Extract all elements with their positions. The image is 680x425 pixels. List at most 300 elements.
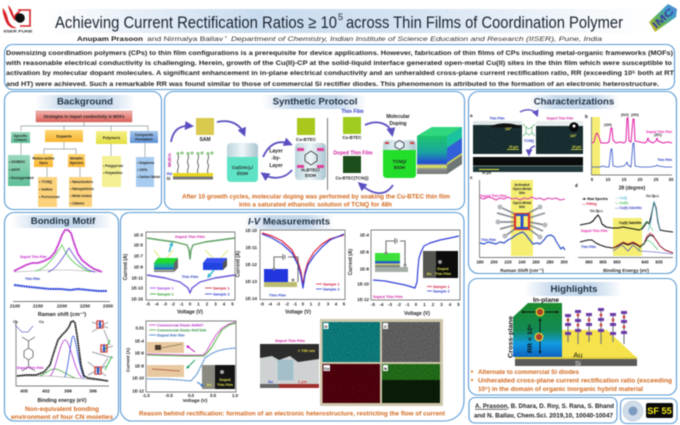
I-V chart: thin film: 1E-11 [246, 245, 258, 250]
Raman chart [470, 175, 568, 274]
SAM substrate: Si [166, 176, 170, 181]
XRD chart: Thin Film [657, 158, 672, 162]
I-V chart: doped film: 1E-6 [360, 250, 370, 254]
contact angle images: 132° [505, 127, 512, 131]
XRD chart: 25 [654, 177, 659, 182]
protocol note [182, 194, 450, 208]
I-V chart: both films: 2 [206, 302, 209, 306]
panel: abstract: activation by molecular dopant molecules. A significant enhancement in in-plane electrical conductivity and an unheralded cross-plane current rectification ratio, RR (exceeding 10⁵ both at RT [6, 70, 675, 77]
I-V chart: both films: Current (A) [123, 253, 129, 280]
rectification note: Reason behind rectification: formation of an electronic heterostructure, restricting the flow of current [139, 410, 445, 418]
in-plane label: In-plane [533, 297, 559, 304]
flowchart root: Strategies to impart conductivity in MOFs [44, 114, 125, 119]
I-V chart: doped film: Doped [437, 267, 449, 271]
Raman chart: Open-Metal [513, 201, 531, 205]
I-V chart: diode comparison: 1E-4 [135, 338, 145, 344]
MOF chain structure [88, 321, 113, 376]
EDS elemental maps [320, 319, 443, 406]
flowchart: composite formation: Formation [135, 138, 153, 142]
I-V chart: both films: 5 [231, 302, 234, 306]
I-V chart: thin film: 5 [343, 302, 346, 306]
I-V chart: doped film: 2 [432, 302, 435, 307]
XRD chart: 15 [622, 177, 627, 182]
XPS chart: Cu(II) Satellite [619, 221, 642, 225]
heading: synthetic protocol: Synthetic Protocol [273, 96, 357, 108]
heading: I-V measurements: I-V Measurements [248, 216, 330, 228]
I-V chart: thin film: Thin Film [269, 294, 286, 298]
beaker: H2BTEC: EtOH [305, 173, 316, 178]
beaker: copper acetate [227, 143, 258, 182]
Raman CN chart: 2250 [80, 304, 91, 308]
I-V chart: doped film: -4 [380, 302, 384, 307]
label: molecular doping [386, 114, 410, 127]
flowchart: dopants: Metallic [70, 156, 83, 160]
SEM cross-section: 1 μm [298, 380, 307, 384]
I-V chart: diode comparison: -0.5 [165, 393, 173, 398]
Raman chart: 240 [518, 260, 526, 264]
Raman chart: 260 [532, 260, 540, 264]
contact angle images: 10 μm [509, 145, 518, 149]
I-V chart: both films: -3 [163, 302, 168, 306]
I-V chart: diode comparison: Current (A) [126, 347, 130, 372]
protocol note: into a saturated ethanolic solution of TCNQ for 48h [239, 202, 392, 208]
I-V chart: doped film: 5 [457, 302, 460, 307]
XPS chart: 950 [613, 260, 621, 264]
I-V chart: diode comparison: 1E-12 [132, 388, 145, 394]
doped thin film swatch [333, 150, 373, 180]
I-V chart: doped film: -1 [406, 302, 410, 307]
Raman chart: c [470, 175, 473, 180]
Raman chart: Site [519, 205, 525, 209]
XRD chart: Doped Thin Film [646, 130, 672, 134]
I-V chart: both films: 1E-13 [131, 286, 144, 290]
I-V chart: doped film: 1E-4 [360, 232, 370, 238]
SEM cross-section: Au [268, 380, 274, 384]
Raman chart: 280 [546, 260, 554, 264]
SEM cross-section: Doped Thin Film [275, 339, 305, 343]
logo: IISER Pune: IISER PUNE [4, 28, 33, 34]
citation box: and N. Ballav, Chem.Sci. 2019,10, 10040-10047 [474, 412, 613, 420]
I-V chart: both films: 3 [214, 302, 217, 306]
XPS N1s chart: Doped Thin Film [17, 366, 44, 370]
XRD chart [585, 113, 674, 192]
badge: SF 55 [620, 398, 677, 424]
flowchart: composite formation: • CNTs [137, 168, 148, 172]
flowchart: specific linkers: • Deoxygenated [9, 176, 34, 180]
I-V chart: doped film: 3 [440, 302, 443, 307]
arrows: cycle [171, 121, 393, 193]
XPS N1s chart: Cu [13, 320, 18, 324]
I-V chart: diode comparison: 1E-8 [135, 364, 145, 368]
doped thin film swatch: Doped Thin Film [333, 150, 373, 156]
XRD chart: 30 [669, 177, 674, 182]
label: molecular doping: Doping [389, 121, 407, 127]
I-V chart: both films: -4 [155, 302, 159, 306]
contact angle images: Doped Thin Film [547, 116, 573, 120]
XPS chart: Cu 2p₁/₂ [590, 209, 604, 213]
title banner: Achieving Current Rectification Ratios ≥ 10 [55, 13, 337, 32]
XPS chart: Cu 2p₃/₂ [646, 194, 660, 198]
contact angle images: 50 μm [482, 171, 491, 175]
device block: RR < 10⁵ [527, 324, 534, 353]
I-V chart: both films: Voltage (V) [177, 310, 203, 316]
EDS elemental maps: C [384, 324, 387, 329]
I-V chart: diode comparison: Doped [219, 378, 231, 382]
flowchart: specific linkers: Linkers [14, 138, 27, 142]
heading: background: Background [57, 96, 113, 108]
contact angle images: a [470, 113, 473, 118]
I-V chart: both films: 1E-9 [134, 264, 144, 270]
I-V chart: doped film [348, 230, 460, 317]
I-V chart: doped film: 4 [449, 302, 452, 307]
Raman chart: Raman Shift (cm⁻¹) [500, 268, 544, 274]
device block: Cross-plane [508, 316, 514, 358]
flowchart: composite formation: • Carbon Waste [137, 175, 161, 179]
Raman CN chart: 2100 [10, 304, 21, 308]
flowchart: dopants: Dyes [39, 161, 48, 165]
beaker: TCNQ: EtOH [394, 165, 405, 170]
I-V chart: diode comparison: 1.0 [232, 393, 239, 398]
I-V chart: both films: 1E-11 [132, 276, 144, 280]
I-V chart: both films: 1 [197, 302, 200, 306]
contact angle images: 132° [570, 134, 577, 138]
heading: bonding motif: Bonding Motif [31, 216, 96, 227]
panel: abstract: with reasonable electrical conductivity is challenging. Herein, growth of the Cu(II)-CP at the solid-liquid interface generated open-metal Cu(II) sites in the thin film which were susceptible to [5, 60, 672, 67]
I-V chart: both films: -2 [171, 302, 176, 306]
I-V chart: both films: Doped Thin Film [175, 235, 205, 239]
I-V chart: doped film: -5 [371, 302, 376, 307]
XRD chart: (010) [621, 113, 629, 117]
I-V chart: thin film: 1E-13 [245, 279, 258, 284]
I-V chart: doped film: 1E-8 [360, 266, 370, 272]
Raman chart: Doped Thin Film [480, 194, 507, 198]
I-V chart: thin film: -2 [285, 302, 290, 306]
logo: IMC diamond: IMC [651, 6, 677, 31]
flowchart: dopants: Dopants [56, 134, 72, 138]
thin film swatch [341, 109, 364, 140]
I-V chart: both films: 1E-3 [134, 232, 144, 238]
SAM swatch: SAM [199, 137, 211, 143]
I-V chart: both films: 0 [189, 302, 192, 306]
XPS chart: — Fitting [582, 202, 597, 206]
XPS N1s chart: Binding energy (eV) [38, 398, 87, 404]
I-V chart: diode comparison: 0.5 [210, 393, 217, 398]
SAM substrate: Au [166, 171, 173, 176]
author line: Department of Chemistry, Indian Institute of Science Education and Research (IISER), Pune, India [231, 36, 602, 43]
author line: Anupam Prasoon [77, 36, 143, 43]
author line: and Nirmalya Ballav [147, 36, 224, 43]
I-V chart: thin film: 1E-14 [245, 296, 258, 301]
contact angle images: TCNQ [524, 139, 534, 143]
panel: highlights [468, 278, 676, 395]
XPS chart: d [575, 183, 578, 188]
contact angle images: Thin Film [489, 116, 505, 120]
XPS N1s chart: 396 [89, 388, 97, 394]
I-V chart: doped film: Sample 1 [433, 285, 450, 289]
I-V chart: both films: Sample 1 [157, 286, 174, 290]
panel: abstract: and HT) were achieved. Such a remarkable RR was found similar to those of commercial Si rectifier diodes. This phenomenon is attributed to the formation of an electronic heterostructure. [6, 81, 659, 88]
SAM swatch [196, 118, 214, 143]
protocol note: After 10 growth cycles, molecular doping was performed by soaking the Cu-BTEC thin film [182, 194, 450, 200]
SEM cross-section: ≈ 700 nm [298, 348, 315, 353]
flowchart: dopants: • TCNQ [39, 180, 52, 184]
XPS N1s chart: Cu [39, 320, 44, 324]
contact angle images: 10 μm [572, 145, 581, 149]
I-V chart: thin film: Current (A) [236, 250, 242, 277]
I-V chart: thin film: -3 [276, 302, 281, 306]
flowchart: polymers: Polymers [103, 135, 120, 140]
I-V chart: thin film: 3 [327, 302, 330, 306]
XRD chart: (100) [604, 123, 612, 127]
flowchart: specific linkers: Specific [14, 134, 27, 138]
Raman CN chart: Raman shift (cm⁻¹) [38, 312, 86, 318]
I-V chart: diode comparison: Thin Film [217, 383, 233, 387]
I-V chart: doped film: Sample 2 [433, 290, 450, 294]
layer by layer label [269, 148, 283, 169]
EDS elemental maps: Cu [324, 366, 330, 371]
Raman chart: Thin Film [481, 238, 496, 242]
flowchart: dopants: • Metal oxides [70, 194, 92, 198]
I-V chart: doped film: -3 [388, 302, 393, 307]
I-V chart: thin film: -4 [268, 302, 273, 306]
XRD chart: b [585, 114, 588, 119]
Raman chart: 300 [560, 260, 568, 264]
I-V chart: thin film: 0 [302, 302, 305, 306]
flowchart: dopants: • Nanoclusters [70, 180, 93, 184]
Raman chart: Open-Metal [513, 187, 531, 191]
highlight bullets [471, 369, 672, 393]
panel: background [4, 92, 162, 210]
I-V chart: doped film: Au [427, 272, 431, 276]
XPS chart: — Cu(II) Satellite [615, 206, 642, 210]
vertical divider [326, 118, 328, 190]
label: molecular doping: Molecular [386, 114, 410, 120]
I-V chart: both films: 4 [223, 302, 226, 306]
I-V chart: both films: 1E-7 [134, 254, 144, 258]
highlight bullets: Unheralded cross-plane current rectification ratio (exceeding [478, 378, 672, 384]
XPS N1s chart: 402 [42, 388, 50, 394]
I-V chart: thin film: 1 [310, 302, 313, 306]
XRD chart: 20 [638, 177, 643, 182]
flowchart root [36, 111, 132, 122]
I-V chart: both films: -5 [146, 302, 151, 306]
layer by layer label: Layer [269, 148, 283, 154]
Raman CN chart: 2300 [103, 304, 114, 308]
I-V chart: diode comparison: -1.0 [142, 393, 150, 398]
citation box [469, 398, 617, 423]
heading: characterizations: Characterizations [534, 96, 614, 108]
I-V chart: thin film: Sample 1 [323, 282, 340, 286]
I-V chart: both films: 1E-15 [131, 296, 144, 302]
EDS elemental maps: N [384, 366, 387, 371]
panel: characterizations [468, 92, 676, 274]
device stack [417, 127, 462, 174]
layer by layer label: -by- [271, 156, 281, 162]
SEM cross-section [260, 339, 319, 388]
I-V chart: doped film: Current (A) [348, 248, 354, 275]
gold substrate: Si [575, 360, 581, 368]
I-V chart: both films: 1E-5 [134, 242, 144, 248]
I-V chart: diode comparison: Au [207, 383, 211, 387]
XRD chart: 2θ (degree) [619, 186, 646, 192]
Raman chart: 180 [476, 260, 484, 264]
panel: abstract [4, 44, 675, 90]
I-V chart: diode comparison [126, 321, 239, 404]
thin film swatch: Thin Film [341, 109, 364, 115]
citation box: A. Prasoon, B. Dhara, D. Roy, S. Rana, S. Bhand [475, 403, 614, 410]
XPS chart: 935 [655, 260, 663, 264]
XRD chart: (201) [654, 133, 662, 137]
XPS chart: 940 [641, 260, 649, 264]
title banner [45, 9, 645, 33]
Cu-BTEC swatch: Cu-BTEC [296, 137, 317, 142]
beaker: H2BTEC [295, 143, 326, 180]
flowchart: dopants [32, 130, 94, 207]
I-V chart: thin film: 4 [335, 302, 338, 306]
I-V chart: both films [123, 232, 235, 316]
SAM substrate: MUDA [167, 153, 172, 167]
Cu-BTEC swatch [296, 118, 317, 142]
gold substrate [515, 330, 637, 368]
I-V chart: diode comparison: Commercial Diode IN4733A [157, 328, 207, 332]
XPS N1s chart: 399 [64, 388, 72, 394]
bonding note [11, 406, 114, 421]
I-V chart: thin film: Voltage (V) [285, 310, 311, 316]
Raman chart: Activated [514, 183, 530, 187]
molecular pillars [565, 308, 627, 344]
I-V chart: doped film: -2 [397, 302, 402, 307]
flowchart: dopants: Redox-active [32, 156, 55, 160]
XPS chart: Binding Energy (eV) [603, 268, 649, 274]
XRD chart: 5 [591, 177, 594, 182]
highlight bullets: Alternate to commercial Si diodes [478, 369, 580, 376]
I-V chart: diode comparison: Commercial Diode IN4007 [157, 324, 204, 328]
flowchart: dopants: • Nanoparticles [70, 187, 94, 191]
I-V chart: thin film: 2 [318, 302, 321, 306]
I-V chart: both films: Sample 2 [157, 292, 174, 296]
I-V chart: thin film: 1E-10 [245, 228, 258, 233]
flowchart: dopants: • Cations [70, 202, 84, 206]
panel: abstract: Downsizing coordination polymers (CPs) to thin film configurations is a prerequisite for device applications. However, fabrication of thin films of CPs including metal-organic frameworks (MOFs) [6, 50, 673, 57]
XRD chart: 10 [606, 177, 611, 182]
logo: IISER Pune [3, 5, 33, 34]
flowchart: specific linkers: • DOBDC [9, 160, 26, 164]
flowchart: dopants: • Ferrocene [39, 195, 60, 199]
flowchart: polymers [96, 131, 127, 187]
I-V chart: thin film: -1 [293, 302, 298, 306]
author line: * [225, 36, 227, 42]
beaker: H2BTEC: H₂BTEC/ [301, 168, 320, 172]
SAM substrate [166, 152, 213, 181]
I-V chart: both films: -1 [180, 302, 184, 306]
I-V chart: diode comparison: Voltage (V) [183, 398, 208, 404]
I-V chart: doped film: Doped Thin Film [373, 295, 403, 299]
I-V chart: both films: Thin Film [182, 275, 199, 279]
panel: synthetic protocol [164, 92, 464, 210]
flowchart: specific linkers: • HITP [9, 168, 21, 172]
flowchart: polymers: • Polypyrrole [103, 164, 123, 168]
gold substrate: Au [573, 350, 583, 360]
I-V chart: doped film: 0 [415, 302, 418, 307]
panel: bonding motif [4, 212, 118, 421]
EDS elemental maps: O [324, 324, 327, 329]
beaker: TCNQ [383, 140, 416, 178]
I-V chart: diode comparison: 0.0 [188, 393, 195, 398]
Raman CN chart: 2150 [33, 304, 44, 308]
XRD chart: (200) [631, 113, 639, 117]
I-V chart: thin film: -5 [260, 302, 265, 306]
Raman chart: 200 [490, 260, 498, 264]
XPS N1s chart: 405 [20, 388, 28, 394]
device block [508, 297, 562, 358]
beaker: copper acetate: Cu(OAc)₂/ [232, 165, 254, 170]
layer by layer label: Layer [269, 163, 283, 169]
contact angle images [470, 110, 583, 175]
panel: I-V measurements [120, 212, 464, 421]
Raman CN chart: 2200 [57, 304, 68, 308]
I-V chart: diode comparison: 0.01 [135, 326, 145, 330]
beaker: copper acetate: EtOH [237, 171, 248, 176]
XPS chart: Doped Thin Film [581, 229, 608, 233]
Raman CN chart: Doped Thin Film [20, 255, 47, 259]
XPS chart: 960 [585, 260, 593, 264]
highlight bullets: 10⁵) in the domain of organic inorganic hybrid material [478, 386, 643, 393]
XPS N1s chart [13, 320, 109, 404]
MOF structure [496, 204, 548, 240]
I-V chart: diode comparison: Doped thin film [157, 334, 185, 338]
I-V chart: thin film [236, 228, 346, 316]
I-V chart: both films: Sample 1 [213, 286, 230, 290]
thin film swatch: Cu-BTEC [342, 135, 362, 140]
I-V chart: thin film: 1E-12 [245, 262, 258, 267]
flowchart: dopants: • Iodine [39, 188, 53, 192]
beaker: TCNQ: TCNQ/ [393, 159, 407, 164]
heading: highlights: Highlights [551, 284, 597, 295]
XPS chart: -■- Raw Spectra [582, 197, 608, 201]
XPS chart: — Cu(II) [615, 201, 628, 205]
badge: SF 55: SF 55 [647, 406, 672, 416]
I-V chart: doped film: Thin Film [435, 272, 451, 276]
Raman CN chart [10, 230, 114, 318]
logo: IMC diamond [649, 4, 677, 32]
I-V chart: thin film: Sample 2 [323, 288, 340, 292]
I-V chart: both films: Sample 2 [213, 292, 230, 296]
flowchart: polymers: • Polyaniline [103, 171, 123, 175]
XPS chart: 955 [599, 260, 607, 264]
I-V chart: doped film: 1E-12 [357, 297, 370, 302]
XPS chart: Thin Film [581, 245, 596, 249]
I-V chart: diode comparison: 1E-6 [135, 350, 145, 356]
I-V chart: diode comparison: 1E-10 [132, 376, 145, 380]
flowchart: composite formation: • Graphene [137, 161, 155, 165]
I-V chart: doped film: Voltage (V) [404, 311, 430, 317]
XPS chart [575, 183, 673, 274]
Raman CN chart: Thin Film [25, 277, 40, 281]
bonding note: environment of four CN moieties [11, 414, 114, 421]
flowchart: composite formation: Composite [135, 133, 153, 137]
title banner: across Thin Films of Coordination Polymer [346, 13, 623, 32]
I-V chart: doped film: 1 [423, 302, 426, 307]
title banner: 5 [338, 12, 343, 22]
flowchart: composite formation [130, 131, 161, 187]
I-V chart: doped film: 1E-10 [357, 282, 370, 286]
XPS chart: — Cu(I) [615, 196, 627, 200]
Raman chart: Site [519, 191, 525, 195]
flowchart: dopants: Species [70, 161, 83, 165]
doped thin film swatch: Cu-BTEC(TCNQ) [335, 176, 369, 180]
bonding note: Non-equivalent bonding [25, 406, 99, 413]
flowchart: specific linkers [8, 132, 34, 186]
